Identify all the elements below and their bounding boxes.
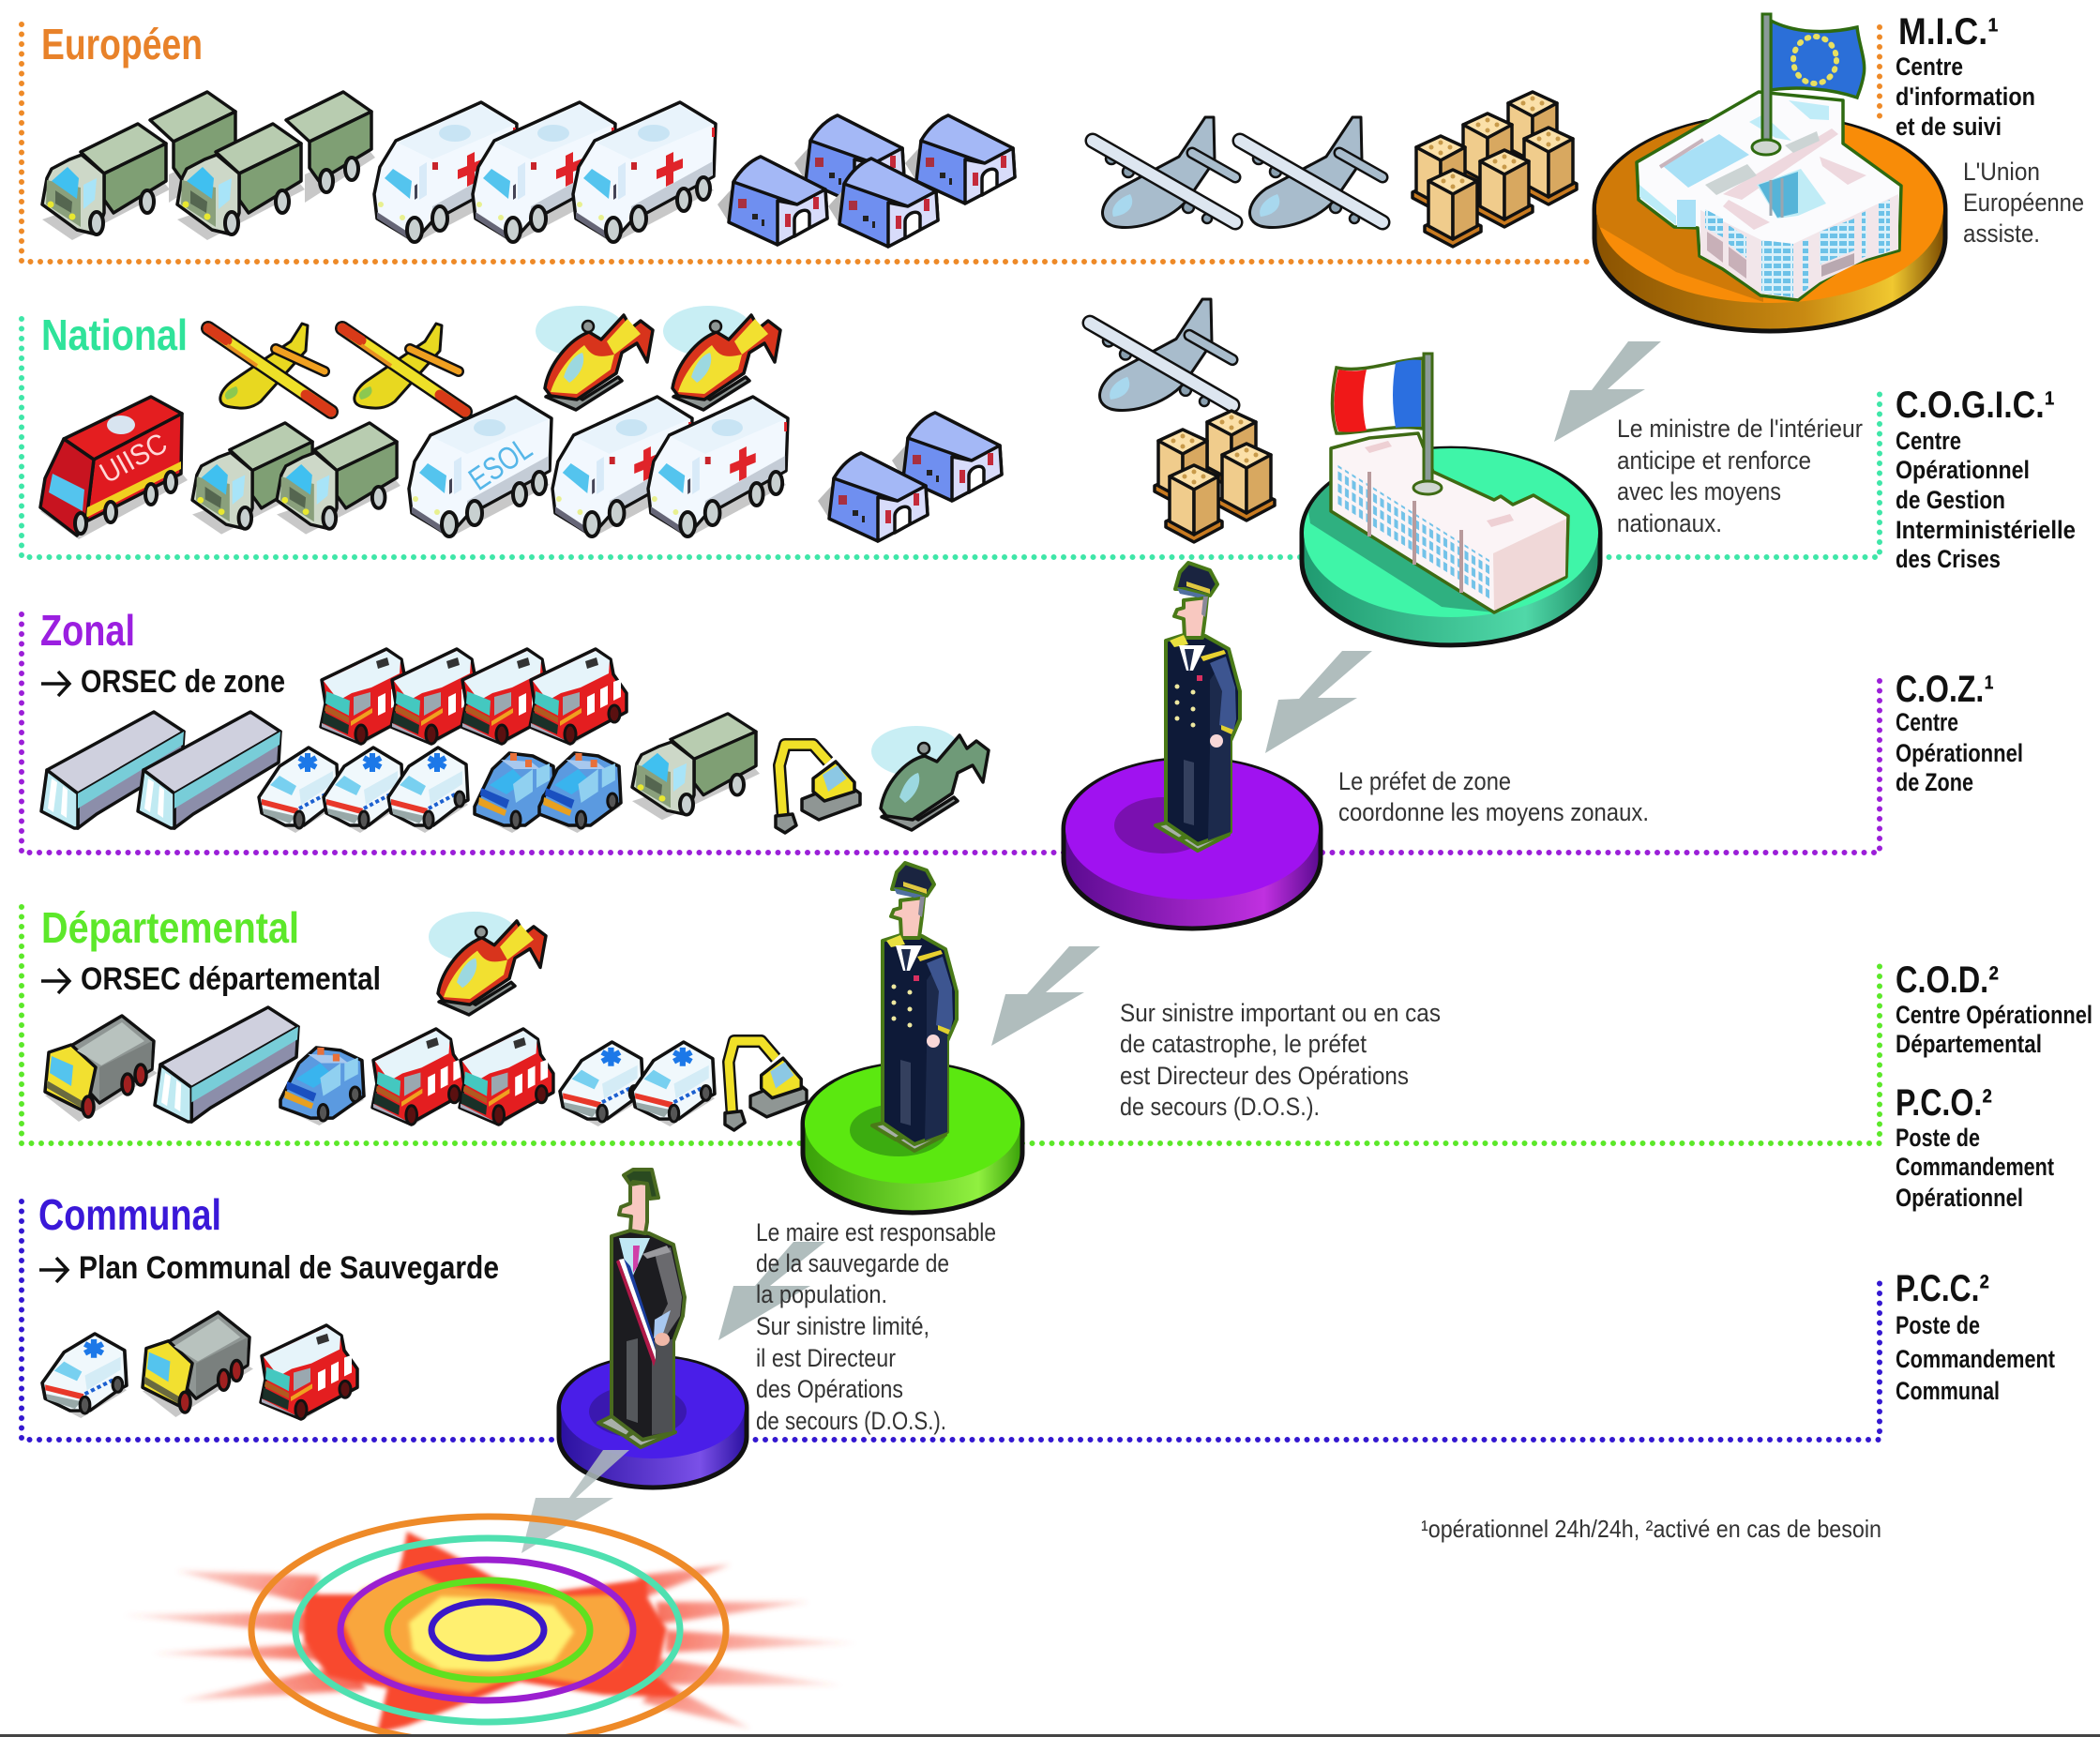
platform: bleu [559, 1357, 747, 1488]
platform: violet [1064, 759, 1321, 929]
heading: C.O.Z. [1896, 669, 2023, 796]
icon: police [280, 1048, 364, 1125]
arrow: européen vers national [1554, 341, 1661, 442]
text: préfet de zone [1338, 767, 1649, 826]
text: préfet de zone: coordonne les moyens zonaux. [1338, 798, 1649, 826]
text: préfet de zone: Le préfet de zone [1338, 767, 1511, 795]
flag: France [1332, 354, 1442, 494]
text: L'Union Européenne assiste [1963, 158, 2084, 248]
icons: palettes [1155, 411, 1275, 542]
icons: bombardiers d'eau [208, 324, 465, 412]
icons: ambulances croix rouge [552, 397, 788, 538]
footnote: ¹opérationnel 24h/24h, ²activé en cas de besoin [1421, 1515, 1881, 1543]
text: le ministre de l'intérieur: avec les moyens [1617, 477, 1781, 506]
text: préfet directeur: de secours (D.O.S.). [1120, 1093, 1320, 1121]
text: préfet directeur: de catastrophe, le préfet [1120, 1030, 1367, 1058]
cercles concentriques des niveaux [251, 1517, 726, 1737]
text: L'Union Européenne assiste: Européenne [1963, 189, 2084, 217]
subheading: ORSEC de zone: ORSEC de zone [81, 664, 285, 700]
icons: tentes [718, 115, 1015, 247]
bottom rule [0, 1734, 2100, 1737]
building: Union Européenne [1637, 92, 1901, 300]
subheading: Plan Communal de Sauvegarde: Plan Communal de Sauvegarde [79, 1250, 499, 1286]
text: L'Union Européenne assiste: assiste. [1963, 219, 2040, 248]
icon: véhicule ESOL [409, 397, 551, 538]
heading: P.C.O.: P.C.O.² [1896, 1082, 1992, 1124]
icons: camions de pompiers [372, 1029, 555, 1126]
icons: bus [41, 712, 280, 828]
heading: M.I.C. [1896, 11, 2035, 141]
heading: C.O.G.I.C. [1896, 385, 2076, 573]
dotted frame: départemental [22, 907, 1880, 1143]
heading: P.C.C.: Poste de [1896, 1311, 1980, 1339]
icon: hélicoptère vert [871, 726, 989, 830]
icon: camion de pompiers [261, 1325, 359, 1421]
icon: camion [632, 714, 760, 820]
text: le maire: des Opérations [756, 1375, 903, 1403]
text: préfet directeur: Sur sinistre important ou en cas [1120, 999, 1441, 1027]
dotted frame: zonal [22, 614, 1880, 853]
icon: bus [155, 1007, 298, 1122]
panel: niveau européen [22, 11, 2084, 331]
icons: camions [192, 423, 400, 535]
icon: hélicoptère [429, 912, 546, 1015]
icon: camion benne [143, 1312, 253, 1417]
heading: C.O.D.: Départemental [1896, 1030, 2042, 1058]
platform: vert menthe [1302, 448, 1600, 645]
flag: Union Européenne [1752, 14, 1865, 155]
text: le maire: il est Directeur [756, 1344, 896, 1372]
dotted frame: communal [22, 1201, 1880, 1440]
icon: pelleteuse [725, 1041, 807, 1130]
icons: tentes [818, 413, 1002, 541]
icon: véhicule ESOL: ESOL [462, 430, 538, 498]
heading: P.C.O.: Opérationnel [1896, 1184, 2023, 1212]
heading: M.I.C.: Centre [1896, 53, 1963, 81]
icon: camion UIISC: UIISC [94, 427, 173, 490]
icons: camions de pompiers [321, 649, 628, 746]
heading: C.O.G.I.C.: des Crises [1896, 545, 2001, 573]
icons: ambulances croix rouge [374, 102, 716, 244]
icons: véhicules de police [475, 753, 621, 833]
panel: niveau communal [22, 1170, 2055, 1553]
arrow: zonal vers départemental [991, 946, 1100, 1046]
arrow: communal vers sinistre [521, 1450, 629, 1553]
explosion: sinistre [122, 1532, 858, 1733]
figure: maire [598, 1170, 685, 1447]
icons: avions [1093, 117, 1382, 228]
heading: C.O.G.I.C.: Interministérielle [1896, 516, 2076, 544]
figure: préfet de zone [1156, 563, 1240, 851]
building: ministère [1331, 433, 1568, 612]
text: le ministre de l'intérieur: Le ministre de l'intérieur [1617, 415, 1863, 443]
text: préfet directeur [1120, 999, 1441, 1121]
icons: camions [42, 92, 375, 240]
text: le maire: la population. [756, 1280, 887, 1308]
subheading: ORSEC départemental: ORSEC départemental [81, 961, 381, 997]
heading: Européen: Européen [41, 20, 203, 68]
panel: niveau national [22, 299, 2076, 645]
heading: P.C.C.: Communal [1896, 1377, 2000, 1405]
text: le ministre de l'intérieur: anticipe et renforce [1617, 446, 1811, 475]
text: le ministre de l'intérieur: nationaux. [1617, 509, 1722, 537]
icon: avion [1090, 299, 1232, 411]
icon: camion benne [45, 1016, 158, 1122]
platform: vert [803, 1064, 1022, 1213]
text: le ministre de l'intérieur [1617, 415, 1863, 537]
text: le maire: de secours (D.O.S.). [756, 1407, 946, 1435]
figure: préfet [872, 863, 957, 1151]
heading: P.C.O.: Commandement [1896, 1153, 2054, 1181]
heading: C.O.Z.: Centre [1896, 708, 1958, 736]
heading: P.C.C.: Commandement [1896, 1345, 2055, 1373]
icons: hélicoptères [536, 306, 780, 410]
heading: C.O.G.I.C.: C.O.G.I.C.¹ [1896, 385, 2055, 426]
heading: Communal: Communal [38, 1190, 221, 1239]
heading: P.C.O. [1896, 1082, 2054, 1212]
heading: C.O.G.I.C.: Centre [1896, 427, 1961, 455]
arrow: national vers zonal [1265, 651, 1372, 753]
icons: SAMU [560, 1042, 715, 1126]
heading: Zonal: Zonal [40, 606, 135, 655]
heading: P.C.C.: P.C.C.² [1896, 1268, 1989, 1309]
heading: C.O.Z.: Opérationnel [1896, 739, 2023, 767]
icons: palettes [1413, 92, 1577, 247]
icon: camion UIISC [40, 397, 188, 539]
dotted frame: européen [22, 24, 1880, 262]
heading: P.C.C. [1896, 1268, 2055, 1405]
arrow: départemental vers communal [718, 1242, 825, 1340]
platform: orange [1590, 94, 1945, 331]
text: le maire: Le maire est responsable [756, 1218, 996, 1246]
heading: C.O.Z.: de Zone [1896, 768, 1973, 796]
text: L'Union Européenne assiste: L'Union [1963, 158, 2040, 186]
icons: SAMU [259, 748, 468, 833]
heading: C.O.G.I.C.: Opérationnel [1896, 456, 2030, 484]
text: le maire: de la sauvegarde de [756, 1249, 949, 1277]
panel: niveau départemental [22, 863, 2092, 1213]
heading: C.O.D.: C.O.D.² [1896, 959, 1999, 1001]
heading: C.O.D. [1896, 959, 2092, 1058]
icon: pelleteuse [776, 745, 860, 833]
icon: SAMU [42, 1334, 127, 1418]
text: le maire [756, 1218, 996, 1435]
heading: M.I.C.: M.I.C.¹ [1898, 11, 1999, 53]
heading: Départemental: Départemental [41, 903, 299, 952]
heading: National: National [41, 310, 188, 359]
panel: niveau zonal [22, 563, 2023, 929]
heading: P.C.O.: Poste de [1896, 1124, 1980, 1152]
text: préfet directeur: est Directeur des Opérations [1120, 1062, 1409, 1090]
heading: C.O.Z.: C.O.Z.¹ [1896, 669, 1994, 710]
heading: C.O.G.I.C.: de Gestion [1896, 486, 2005, 514]
heading: M.I.C.: d'information [1896, 83, 2035, 111]
heading: M.I.C.: et de suivi [1896, 113, 2002, 141]
text: le maire: Sur sinistre limité, [756, 1312, 929, 1340]
dotted frame: national [22, 319, 1880, 557]
